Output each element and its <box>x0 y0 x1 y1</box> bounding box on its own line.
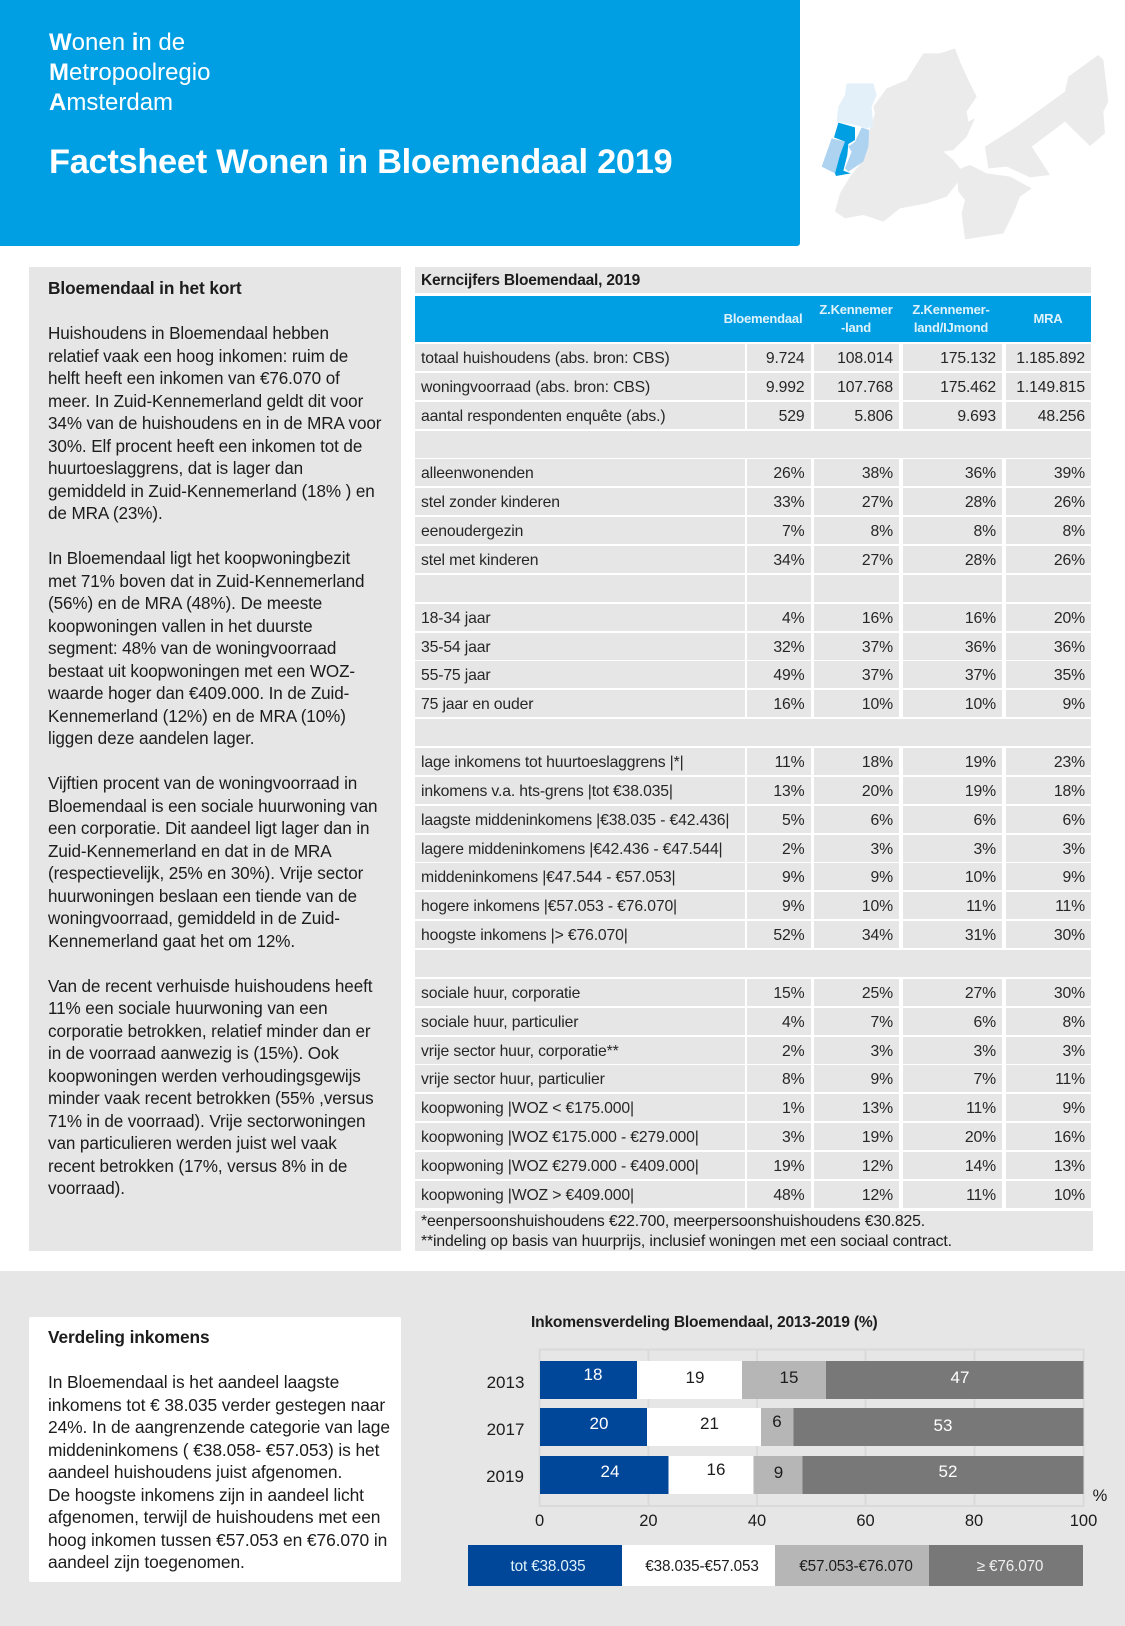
row: alleenwonenden: 39% <box>1054 465 1085 482</box>
summary text: van particulieren werden juist wel vaak <box>48 1134 337 1153</box>
panel: Bloemendaal in het kort <box>29 267 401 1251</box>
row: koopwoning WOZ 279.000-409.000: 13% <box>1054 1158 1085 1175</box>
spacer row with cells <box>415 575 1091 602</box>
row: sociale huur, particulier: 6% <box>974 1014 996 1031</box>
row: aantal respondenten: 5.806 <box>854 408 893 425</box>
row: eenoudergezin <box>415 517 1091 544</box>
row: 35-54 jaar <box>415 633 1091 660</box>
row: 75 jaar en ouder <box>415 690 1091 717</box>
row: stel zonder kinderen: 26% <box>1054 494 1085 511</box>
row: koopwoning WOZ boven 409.000: 48% <box>773 1187 804 1204</box>
summary text: in de voorraad aanwezig is (15%). Ook <box>48 1044 339 1063</box>
legend: ≥ €76.070 <box>977 1558 1043 1575</box>
bar 2017 <box>540 1408 1084 1446</box>
row: sociale huur, particulier: 7% <box>871 1014 893 1031</box>
row: koopwoning WOZ boven 409.000: 12% <box>862 1187 893 1204</box>
row: stel met kinderen: 34% <box>773 552 804 569</box>
row: vrije sector huur, corporatie: 3% <box>974 1043 996 1060</box>
table footnotes: **indeling op basis van huurprijs, inclusief woningen met een sociaal contract. <box>421 1232 952 1250</box>
row: stel zonder kinderen: 28% <box>965 494 996 511</box>
row: vrije sector huur, particulier: 11% <box>1055 1071 1085 1088</box>
row: koopwoning WOZ 279.000-409.000: 19% <box>773 1158 804 1175</box>
income text <box>48 1372 390 1572</box>
row: koopwoning WOZ 175.000-279.000: 3% <box>782 1129 804 1146</box>
x axis labels: 100 <box>1070 1512 1097 1530</box>
bar 2019: 52 <box>939 1462 957 1481</box>
summary text: Kennemerland (12%) en de MRA (10%) <box>48 706 346 726</box>
column: Z.Kennemerland: -land <box>841 320 871 334</box>
key figures table <box>415 344 1091 1208</box>
row: eenoudergezin: eenoudergezin <box>421 523 523 540</box>
row: 35-54 jaar: 32% <box>773 639 804 656</box>
row: hoogste inkomens <box>415 921 1091 948</box>
row: koopwoning WOZ boven 409.000: koopwoning |WOZ > €409.000| <box>421 1187 634 1204</box>
summary text: 34% van de huishoudens en in de MRA voor <box>48 414 381 433</box>
income text: middeninkomens ( €38.058- €57.053) is het <box>48 1440 379 1460</box>
row: stel met kinderen: stel met kinderen <box>421 552 538 569</box>
bottom band <box>0 1271 1125 1626</box>
row: middeninkomens: middeninkomens |€47.544 - €57.053| <box>421 869 675 886</box>
row: 55-75 jaar: 35% <box>1054 667 1085 684</box>
row: 55-75 jaar: 55-75 jaar <box>421 667 490 684</box>
year labels: 2013 <box>487 1373 524 1392</box>
row: sociale huur, corporatie: 25% <box>862 985 893 1002</box>
income text: afgenomen, terwijl de huishoudens met een <box>48 1507 380 1527</box>
summary text: bestaat uit koopwoningen met een WOZ- <box>48 662 355 680</box>
row: lagere middeninkomens: 3% <box>974 841 996 858</box>
row: vrije sector huur, particulier: 9% <box>871 1071 893 1088</box>
title: Factsheet Wonen in Bloemendaal 2019 <box>49 143 672 181</box>
legend: tot €38.035 <box>511 1558 585 1575</box>
summary text: de MRA (23%). <box>48 504 163 523</box>
bar 2013: 47 <box>951 1368 969 1387</box>
table title bar: Kerncijfers Bloemendaal, 2019 <box>421 272 640 289</box>
bar 2013 <box>540 1361 1084 1399</box>
row: woningvoorraad: 1.149.815 <box>1016 379 1085 396</box>
summary text: voorraad). <box>48 1179 125 1198</box>
row: 75 jaar en ouder: 9% <box>1063 696 1085 713</box>
row: 55-75 jaar: 37% <box>965 667 996 684</box>
income text: 24%. In de aangrenzende categorie van lage <box>48 1417 390 1437</box>
year labels <box>486 1373 524 1486</box>
row: stel met kinderen: 28% <box>965 552 996 569</box>
legend: €57.053-€76.070 <box>799 1558 913 1575</box>
row: aantal respondenten: 9.693 <box>957 408 996 425</box>
row: stel zonder kinderen: 27% <box>862 494 893 511</box>
row: koopwoning WOZ 175.000-279.000 <box>415 1123 1091 1150</box>
row: middeninkomens: 9% <box>782 869 804 886</box>
row: hogere inkomens: 10% <box>862 898 893 915</box>
row: middeninkomens: 9% <box>871 869 893 886</box>
row: 55-75 jaar <box>415 661 1091 688</box>
row: 75 jaar en ouder: 10% <box>965 696 996 713</box>
row: sociale huur, particulier: 4% <box>782 1014 804 1031</box>
legend <box>468 1545 1083 1586</box>
locator map of the metropolitan region <box>822 48 1108 240</box>
summary text <box>48 324 382 1198</box>
row: lage inkomens: 19% <box>965 754 996 771</box>
row: vrije sector huur, particulier: 8% <box>782 1071 804 1088</box>
row: 18-34 jaar <box>415 604 1091 631</box>
row: 35-54 jaar: 35-54 jaar <box>421 639 490 656</box>
summary text: Kennemerland gaat het om 12%. <box>48 932 295 950</box>
row: stel met kinderen <box>415 546 1091 573</box>
row: totaal huishoudens: 108.014 <box>837 350 893 367</box>
summary text: minder vaak recent betrokken (55% ,versus <box>48 1089 374 1108</box>
row: woningvoorraad: 107.768 <box>837 379 893 396</box>
summary text: corporatie betrokken, relatief minder dan er <box>48 1022 370 1040</box>
summary text: met 71% boven dat in Zuid-Kennemerland <box>48 572 364 590</box>
row: eenoudergezin: 8% <box>1063 523 1085 540</box>
row: vrije sector huur, corporatie: 2% <box>782 1043 804 1060</box>
bar 2013: 18 <box>584 1365 602 1384</box>
row: hogere inkomens: 11% <box>966 898 996 915</box>
row: koopwoning WOZ onder 175.000: koopwoning |WOZ < €175.000| <box>421 1100 634 1117</box>
row: 18-34 jaar: 4% <box>782 610 804 627</box>
row: woningvoorraad: 175.462 <box>940 379 996 396</box>
income text: hoog inkomen tussen €57.053 en €76.070 in <box>48 1530 387 1550</box>
x axis labels: 40 <box>748 1512 766 1530</box>
row: vrije sector huur, particulier: 7% <box>974 1071 996 1088</box>
column: MRA: MRA <box>1033 311 1062 326</box>
summary text: 11% een sociale huurwoning van een <box>48 999 327 1018</box>
row: lagere middeninkomens: 3% <box>871 841 893 858</box>
row: lage inkomens: lage inkomens tot huurtoeslaggrens |*| <box>421 754 684 771</box>
row: lagere middeninkomens <box>415 835 1091 862</box>
row: stel met kinderen: 27% <box>862 552 893 569</box>
summary text: recent betrokken (17%, versus 8% in de <box>48 1156 347 1176</box>
row: vrije sector huur, corporatie: 3% <box>1063 1043 1085 1060</box>
row: alleenwonenden: 26% <box>773 465 804 482</box>
row: alleenwonenden: 36% <box>965 465 996 482</box>
year labels: 2017 <box>487 1420 524 1439</box>
income text: aandeel zijn toegenomen. <box>48 1552 245 1572</box>
stacked bar chart: income distribution <box>468 1314 1108 1586</box>
row: lage inkomens <box>415 748 1091 775</box>
row: inkomens v.a. hts-grens: inkomens v.a. hts-grens |tot €38.035| <box>421 783 673 800</box>
row: laagste middeninkomens: 6% <box>871 812 893 829</box>
bar 2017: 6 <box>772 1412 782 1431</box>
row: 18-34 jaar: 18-34 jaar <box>421 610 490 627</box>
income text: De hoogste inkomens zijn in aandeel licht <box>48 1484 364 1504</box>
row: hoogste inkomens: 52% <box>773 927 804 944</box>
row: aantal respondenten: aantal respondenten enquête (abs.) <box>421 408 665 425</box>
row: koopwoning WOZ onder 175.000: 13% <box>862 1100 893 1117</box>
row: woningvoorraad <box>415 373 1091 400</box>
organisation name: Wonen in de <box>49 29 185 56</box>
row: 35-54 jaar: 37% <box>862 639 893 656</box>
row: 55-75 jaar: 49% <box>773 667 804 684</box>
year labels: 2019 <box>486 1467 524 1486</box>
row: koopwoning WOZ onder 175.000: 9% <box>1063 1100 1085 1117</box>
row: koopwoning WOZ 279.000-409.000 <box>415 1152 1091 1179</box>
row: lagere middeninkomens: lagere middeninkomens |€42.436 - €47.544| <box>421 841 722 858</box>
column: Z.Kennemerland: Z.Kennemer <box>819 302 893 317</box>
income text: inkomens tot € 38.035 verder gestegen naar <box>48 1394 385 1414</box>
summary text: meer. In Zuid-Kennemerland geldt dit voor <box>48 392 363 410</box>
row: koopwoning WOZ onder 175.000: 11% <box>966 1100 996 1117</box>
row: woningvoorraad: 9.992 <box>766 379 804 396</box>
row: aantal respondenten: 529 <box>779 408 804 425</box>
row: koopwoning WOZ boven 409.000: 10% <box>1054 1187 1085 1204</box>
organisation name <box>49 29 210 116</box>
x axis labels: 80 <box>965 1512 983 1530</box>
row: laagste middeninkomens: laagste middeninkomens |€38.035 - €42.436| <box>421 812 729 829</box>
bar 2013: 19 <box>686 1368 704 1387</box>
row: sociale huur, corporatie <box>415 979 1091 1006</box>
summary text: een corporatie. Dit aandeel ligt lager dan in <box>48 819 369 838</box>
bar 2017: 21 <box>700 1414 719 1433</box>
row: laagste middeninkomens: 6% <box>1063 812 1085 829</box>
row: koopwoning WOZ 175.000-279.000: 19% <box>862 1129 893 1146</box>
table footnotes <box>415 1211 1093 1251</box>
row: 35-54 jaar: 36% <box>965 639 996 656</box>
row: vrije sector huur, corporatie <box>415 1037 1091 1064</box>
summary text: Zuid-Kennemerland en dat in de MRA <box>48 842 332 860</box>
summary text: liggen deze aandelen lager. <box>48 729 254 748</box>
row: koopwoning WOZ boven 409.000: 11% <box>966 1187 996 1204</box>
summary text: huurtoeslaggrens, dat is lager dan <box>48 459 303 478</box>
bar 2019: 9 <box>774 1463 783 1482</box>
row: middeninkomens: 9% <box>1063 869 1085 886</box>
row: lage inkomens: 23% <box>1054 754 1085 771</box>
spacer row <box>415 431 1091 458</box>
row: vrije sector huur, corporatie: vrije sector huur, corporatie** <box>421 1043 619 1060</box>
row: totaal huishoudens: 175.132 <box>940 350 996 367</box>
summary text: huurwoningen beslaan een tiende van de <box>48 886 357 906</box>
row: alleenwonenden <box>415 459 1091 486</box>
organisation name: Amsterdam <box>49 89 173 116</box>
table title bar <box>415 267 1091 293</box>
x axis labels: 20 <box>639 1512 658 1530</box>
row: sociale huur, particulier <box>415 1008 1091 1035</box>
summary text: koopwoningen vallen in het duurste <box>48 616 313 636</box>
row: koopwoning WOZ 279.000-409.000: 14% <box>965 1158 996 1175</box>
row: 75 jaar en ouder: 10% <box>862 696 893 713</box>
row: hoogste inkomens: 34% <box>862 927 893 944</box>
row: sociale huur, corporatie: 30% <box>1054 985 1085 1002</box>
row: eenoudergezin: 8% <box>974 523 996 540</box>
row: vrije sector huur, corporatie: 3% <box>871 1043 893 1060</box>
row: koopwoning WOZ 279.000-409.000: 12% <box>862 1158 893 1175</box>
row: eenoudergezin: 8% <box>871 523 893 540</box>
row: hoogste inkomens: hoogste inkomens |> €76.070| <box>421 927 628 944</box>
summary text: segment: 48% van de woningvoorraad <box>48 639 336 658</box>
row: totaal huishoudens: 9.724 <box>766 350 804 367</box>
row: vrije sector huur, particulier <box>415 1065 1091 1092</box>
row: sociale huur, corporatie: sociale huur, corporatie <box>421 985 580 1002</box>
row: hoogste inkomens: 31% <box>965 927 996 944</box>
row: alleenwonenden: 38% <box>862 465 893 482</box>
summary text: woningvoorraad, gemiddeld in de Zuid- <box>48 909 340 928</box>
row: koopwoning WOZ onder 175.000: 1% <box>782 1100 804 1117</box>
spacer row <box>415 719 1091 746</box>
summary text: Van de recent verhuisde huishoudens heeft <box>48 976 372 996</box>
row: stel zonder kinderen: 33% <box>773 494 804 511</box>
bar 2019 <box>540 1456 1084 1494</box>
row: laagste middeninkomens: 6% <box>974 812 996 829</box>
row: lage inkomens: 18% <box>862 754 893 771</box>
summary text: In Bloemendaal ligt het koopwoningbezit <box>48 549 350 568</box>
row: hogere inkomens <box>415 892 1091 919</box>
row: sociale huur, corporatie: 27% <box>965 985 996 1002</box>
plot grid <box>540 1349 1084 1506</box>
row: stel met kinderen: 26% <box>1054 552 1085 569</box>
row: sociale huur, corporatie: 15% <box>773 985 804 1002</box>
bar 2017: 53 <box>934 1416 952 1435</box>
row: 75 jaar en ouder: 16% <box>773 696 804 713</box>
row: aantal respondenten <box>415 402 1091 429</box>
summary text: 30%. Elf procent heeft een inkomen tot de <box>48 436 362 456</box>
row: laagste middeninkomens: 5% <box>782 812 804 829</box>
row: hogere inkomens: 9% <box>782 898 804 915</box>
row: stel zonder kinderen: stel zonder kinderen <box>421 494 560 511</box>
row: koopwoning WOZ onder 175.000 <box>415 1094 1091 1121</box>
row: koopwoning WOZ 175.000-279.000: 20% <box>965 1129 996 1146</box>
x axis labels: 0 <box>535 1512 544 1530</box>
summary text: Huishoudens in Bloemendaal hebben <box>48 324 329 343</box>
row: lagere middeninkomens: 2% <box>782 841 804 858</box>
x axis labels: % <box>1093 1487 1108 1505</box>
row: 18-34 jaar: 20% <box>1054 610 1085 627</box>
row: eenoudergezin: 7% <box>782 523 804 540</box>
row: inkomens v.a. hts-grens: 13% <box>773 783 804 800</box>
legend: €38.035-€57.053 <box>645 1558 759 1575</box>
row: 35-54 jaar: 36% <box>1054 639 1085 656</box>
row: lage inkomens: 11% <box>775 754 804 771</box>
organisation name: Metropoolregio <box>49 59 210 86</box>
table footnotes: *eenpersoonshuishoudens €22.700, meerpersoonshuishoudens €30.825. <box>421 1213 925 1230</box>
row: koopwoning WOZ 175.000-279.000: 16% <box>1054 1129 1085 1146</box>
table header <box>415 296 1091 342</box>
income text: In Bloemendaal is het aandeel laagste <box>48 1372 339 1392</box>
summary text: (respectievelijk, 25% en 30%). Vrije sector <box>48 864 363 883</box>
row: laagste middeninkomens <box>415 806 1091 833</box>
row: inkomens v.a. hts-grens: 18% <box>1054 783 1085 800</box>
bar 2013: 15 <box>780 1368 798 1387</box>
header banner <box>0 0 800 246</box>
row: inkomens v.a. hts-grens: 20% <box>862 783 893 800</box>
column: Z.Kennemerland/IJmond <box>912 302 990 334</box>
row: 55-75 jaar: 37% <box>862 667 893 684</box>
row: koopwoning WOZ 175.000-279.000: koopwoning |WOZ €175.000 - €279.000| <box>421 1129 699 1146</box>
row: sociale huur, particulier: 8% <box>1063 1014 1085 1031</box>
summary text: waarde hoger dan €409.000. In de Zuid- <box>48 684 349 703</box>
row: totaal huishoudens: totaal huishoudens (abs. bron: CBS) <box>421 350 670 367</box>
row: sociale huur, particulier: sociale huur, particulier <box>421 1014 578 1031</box>
row: hoogste inkomens: 30% <box>1054 927 1085 944</box>
row: inkomens v.a. hts-grens <box>415 777 1091 804</box>
row: aantal respondenten: 48.256 <box>1038 408 1085 425</box>
summary text: Vijftien procent van de woningvoorraad in <box>48 774 357 793</box>
bar 2017: 20 <box>590 1414 608 1433</box>
summary text: koopwoningen werden verhoudingsgewijs <box>48 1066 361 1086</box>
column: Z.Kennemerland/IJmond: Z.Kennemer- <box>912 302 990 317</box>
x axis labels <box>535 1487 1108 1530</box>
row: alleenwonenden: alleenwonenden <box>421 465 534 482</box>
row: 18-34 jaar: 16% <box>862 610 893 627</box>
income text: aandeel huishoudens juist afgenomen. <box>48 1462 342 1482</box>
row: hogere inkomens: hogere inkomens |€57.053 - €76.070| <box>421 898 677 915</box>
panel heading: Bloemendaal in het kort <box>48 278 242 298</box>
row: middeninkomens <box>415 863 1091 890</box>
row: totaal huishoudens: 1.185.892 <box>1016 350 1085 367</box>
row: woningvoorraad: woningvoorraad (abs. bron: CBS) <box>421 379 650 396</box>
column: Z.Kennemerland/IJmond: land/IJmond <box>914 320 988 334</box>
chart title: Inkomensverdeling Bloemendaal, 2013-2019 (%) <box>531 1314 878 1331</box>
bar 2019: 24 <box>601 1462 619 1481</box>
panel: Verdeling inkomens <box>29 1317 401 1582</box>
summary text: Bloemendaal is een sociale huurwoning van <box>48 796 377 816</box>
column: Z.Kennemerland <box>819 302 893 334</box>
summary text: relatief vaak een hoog inkomen: ruim de <box>48 346 348 366</box>
row: middeninkomens: 10% <box>965 869 996 886</box>
column: Bloemendaal: Bloemendaal <box>724 311 802 326</box>
row: inkomens v.a. hts-grens: 19% <box>965 783 996 800</box>
row: stel zonder kinderen <box>415 488 1091 515</box>
summary text: (56%) en de MRA (48%). De meeste <box>48 594 322 613</box>
row: totaal huishoudens <box>415 344 1091 371</box>
row: 18-34 jaar: 16% <box>965 610 996 627</box>
row: lagere middeninkomens: 3% <box>1063 841 1085 858</box>
row: koopwoning WOZ boven 409.000 <box>415 1181 1091 1208</box>
row: hogere inkomens: 11% <box>1055 898 1085 915</box>
summary text: 71% in de voorraad). Vrije sectorwoningen <box>48 1112 365 1130</box>
row: koopwoning WOZ 279.000-409.000: koopwoning |WOZ €279.000 - €409.000| <box>421 1158 699 1175</box>
x axis labels: 60 <box>856 1512 875 1530</box>
bar 2019: 16 <box>707 1460 725 1479</box>
summary text: helft heeft een inkomen van €76.070 of <box>48 369 340 388</box>
spacer row <box>415 950 1091 977</box>
row: 75 jaar en ouder: 75 jaar en ouder <box>421 696 533 713</box>
panel heading: Verdeling inkomens <box>48 1327 209 1347</box>
summary text: gemiddeld in Zuid-Kennemerland (18% ) en <box>48 482 375 500</box>
row: vrije sector huur, particulier: vrije sector huur, particulier <box>421 1071 605 1088</box>
